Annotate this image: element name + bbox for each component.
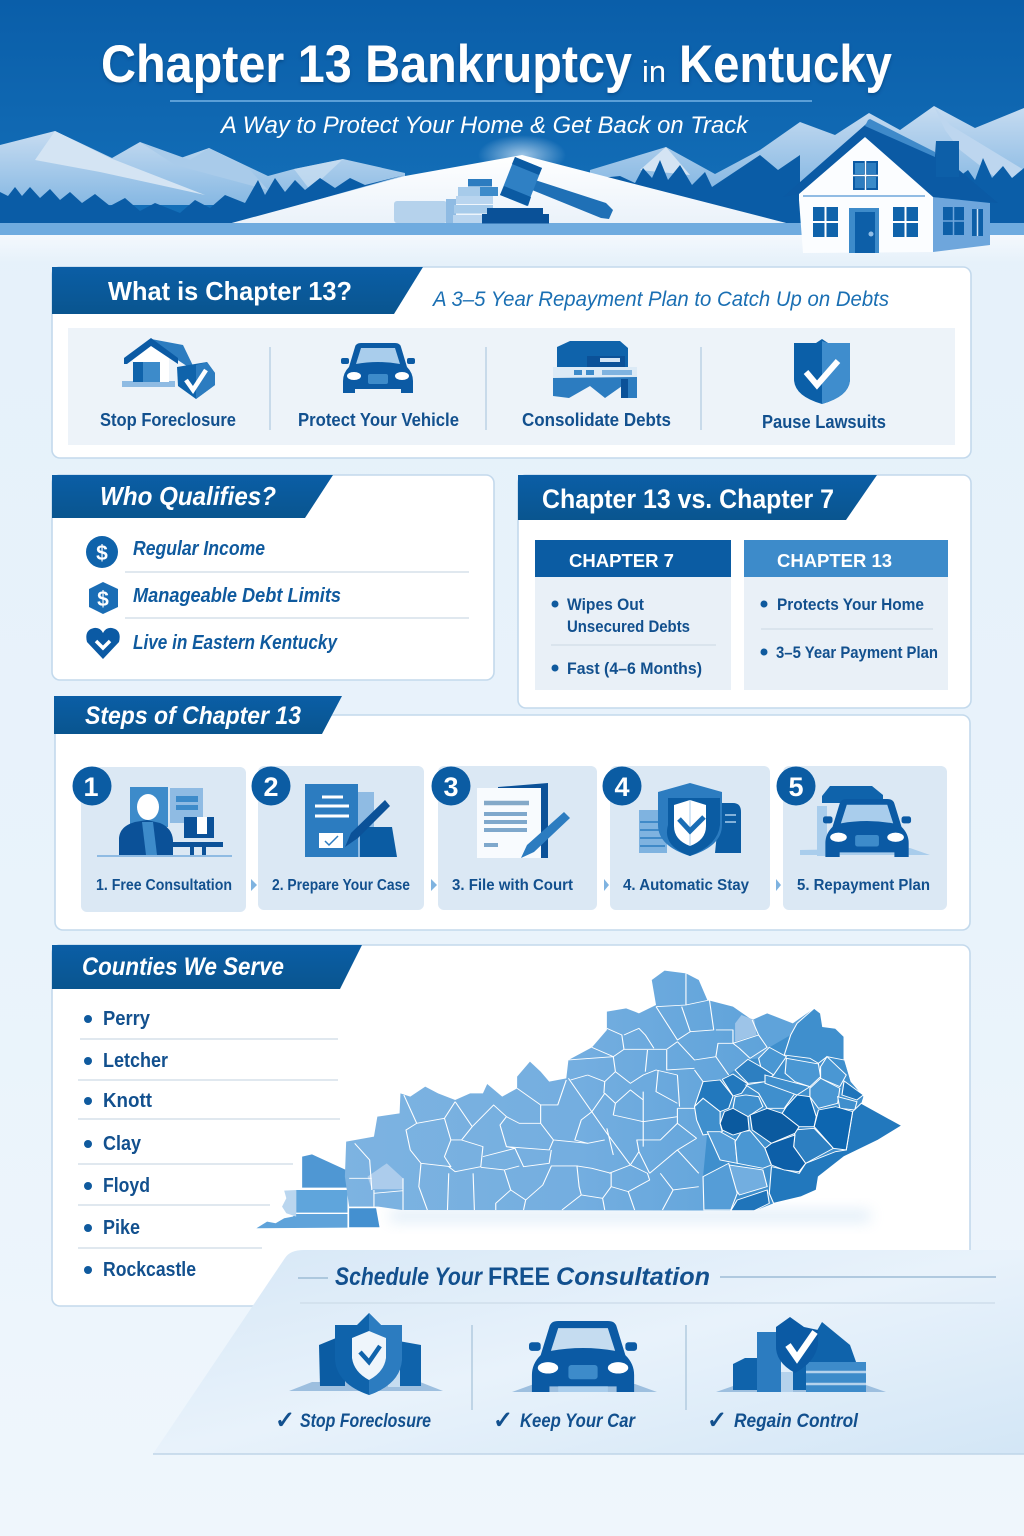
icon: filing [477, 783, 570, 858]
step 2 [252, 766, 424, 910]
label: regain control: Regain Control [734, 1411, 859, 1432]
right tree line [600, 155, 800, 224]
item: manageable debt limits: Manageable Debt Limits [133, 585, 341, 607]
panel: chapter 13 vs chapter 7 [518, 475, 971, 708]
icon: car [512, 1321, 657, 1392]
step 5: 5. Repayment Plan [797, 877, 930, 894]
arrow [431, 879, 437, 891]
icon: heart [86, 628, 120, 659]
icon: prepare documents [305, 784, 397, 857]
label: stop foreclosure: Stop Foreclosure [100, 410, 236, 430]
heading banner [52, 267, 423, 314]
column: chapter 13 [744, 540, 948, 690]
eastern region backing [694, 1008, 902, 1211]
map of Kentucky counties [256, 971, 902, 1228]
icon: stack of debts [553, 341, 637, 398]
county list: Perry [103, 1007, 151, 1030]
step 5: 5 [788, 772, 804, 802]
label: protect your vehicle: Protect Your Vehicle [298, 410, 459, 430]
main state body [345, 971, 902, 1211]
heading [335, 1263, 710, 1291]
arrow [776, 879, 781, 891]
panel: schedule your free consultation [153, 1250, 1024, 1454]
step 4: 4. Automatic Stay [623, 877, 749, 894]
heading banner: What is Chapter 13? [108, 276, 352, 306]
right mountains [590, 106, 1024, 200]
left mountains [0, 131, 405, 205]
step 4: 4 [614, 772, 630, 802]
step 1 [72, 766, 246, 912]
panel: what is chapter 13 [52, 267, 971, 458]
panel: counties we serve [52, 945, 970, 1306]
county list: Knott [103, 1089, 152, 1112]
lighter patches [368, 1163, 403, 1189]
county list: Clay [103, 1132, 142, 1155]
county list: Letcher [103, 1049, 168, 1072]
step 2: 2. Prepare Your Case [272, 877, 410, 894]
label: stop foreclosure [275, 1407, 431, 1434]
tagline: A 3–5 Year Repayment Plan to Catch Up on Debts [431, 288, 889, 311]
label: keep your car [493, 1407, 636, 1434]
heading: FREE [488, 1263, 550, 1291]
glow behind hill [478, 135, 566, 175]
icon: dollar coin [86, 536, 118, 568]
label: keep your car: ✓ [493, 1407, 513, 1434]
column: chapter 7 [535, 540, 731, 690]
icon: consultation [97, 787, 232, 857]
icon: house with shield [122, 338, 215, 399]
header banner [0, 0, 1024, 263]
icon: car [341, 343, 415, 393]
left tree line [0, 175, 405, 224]
county list: Rockcastle [103, 1258, 196, 1281]
icon: dollar shield: $ [97, 588, 109, 611]
label: pause lawsuits: Pause Lawsuits [762, 412, 886, 432]
label: keep your car: Keep Your Car [520, 1411, 636, 1432]
panel: steps of chapter 13 [54, 696, 970, 930]
county list [84, 1007, 196, 1281]
column: chapter 13: CHAPTER 13 [777, 550, 892, 571]
step 5 [776, 766, 947, 910]
icon: shield with check [794, 339, 850, 404]
county list: Floyd [103, 1174, 150, 1197]
icon: gavel and books [394, 157, 613, 224]
column: chapter 7: Fast (4–6 Months) [567, 660, 702, 678]
icon: shield over home [289, 1313, 443, 1395]
column: chapter 13: Protects Your Home [777, 596, 924, 614]
eastern counties [694, 1008, 902, 1211]
western counties [256, 1154, 380, 1228]
title: in [642, 54, 666, 89]
heading: Consultation [556, 1263, 710, 1291]
label: regain control: ✓ [707, 1407, 727, 1434]
snow hill [228, 155, 790, 224]
column: chapter 7: CHAPTER 7 [569, 550, 674, 571]
heading banner [52, 475, 333, 518]
subtitle: A Way to Protect Your Home & Get Back on Track [219, 112, 750, 139]
label: regain control [707, 1407, 859, 1434]
title: Chapter 13 Bankruptcy [101, 35, 632, 94]
step 1: 1. Free Consultation [96, 877, 232, 894]
icon: regain control [716, 1317, 886, 1392]
column: chapter 13: 3–5 Year Payment Plan [776, 644, 938, 662]
heading banner [52, 945, 362, 989]
icon: dollar coin: $ [96, 542, 108, 565]
county borders [349, 973, 767, 1210]
label: stop foreclosure: Stop Foreclosure [300, 1411, 431, 1432]
item: regular income: Regular Income [133, 538, 265, 560]
step 3: 3. File with Court [452, 877, 573, 894]
heading banner: Counties We Serve [82, 953, 284, 981]
heading: Schedule Your [335, 1263, 483, 1291]
title: Kentucky [679, 35, 892, 94]
step 3 [432, 766, 597, 910]
heading banner: Chapter 13 vs. Chapter 7 [542, 484, 834, 514]
benefits strip [68, 328, 955, 445]
county list: Pike [103, 1216, 140, 1239]
arrow [251, 879, 257, 891]
icon: car on payment plan [800, 786, 930, 857]
icon: dollar shield [89, 582, 118, 614]
heading banner [54, 696, 342, 734]
ground band [0, 223, 1024, 235]
icon: house [783, 119, 998, 253]
heading banner: Who Qualifies? [100, 481, 276, 511]
heading banner: Steps of Chapter 13 [85, 702, 301, 730]
item: live in eastern kentucky: Live in Eastern Kentucky [133, 632, 338, 654]
column: chapter 7: Unsecured Debts [567, 618, 690, 636]
step 3: 3 [443, 772, 459, 802]
step 1: 1 [83, 772, 99, 802]
column: chapter 7: Wipes Out [567, 596, 644, 614]
step 2: 2 [263, 772, 279, 802]
step 4 [602, 766, 770, 910]
arrow [604, 879, 609, 891]
icon: shield with documents [639, 783, 741, 856]
heading banner [518, 475, 877, 520]
label: consolidate debts: Consolidate Debts [522, 410, 671, 430]
panel: who qualifies [52, 475, 494, 680]
label: stop foreclosure: ✓ [275, 1407, 295, 1434]
